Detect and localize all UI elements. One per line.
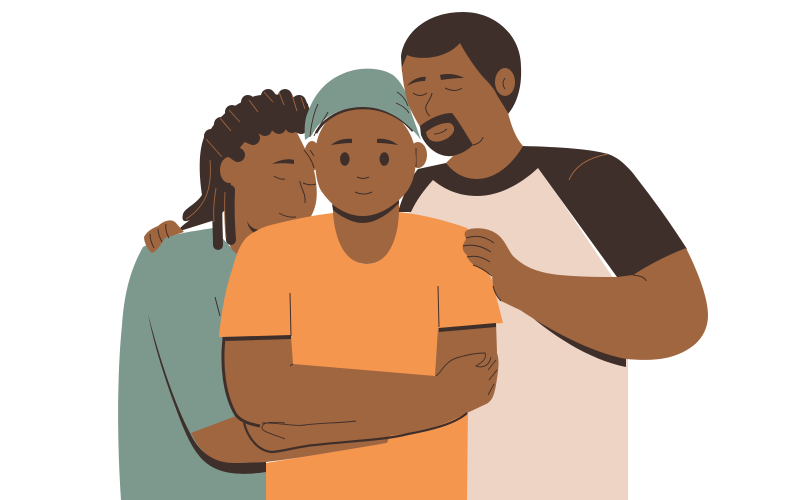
woman: teal top: [118, 228, 400, 500]
man: arm and hand: [463, 228, 708, 367]
bandana folds: [310, 92, 409, 137]
lower shirt: [266, 405, 468, 500]
hair mass: [205, 94, 309, 160]
jaw shadow: [332, 200, 399, 223]
woman's brow: [272, 159, 294, 164]
hairline shadow: [316, 108, 413, 133]
arm outline: [223, 338, 260, 426]
hanging locks: [217, 190, 231, 245]
ear line: [503, 78, 505, 89]
crossed arm: [223, 322, 499, 452]
face: [315, 106, 416, 219]
boy: orange shirt: [219, 212, 503, 376]
left ear: [304, 141, 320, 171]
boy's nose and mouth: [355, 177, 372, 194]
face and neck: [402, 43, 523, 179]
ear: [495, 68, 515, 96]
beard: [420, 113, 473, 156]
mouth patch: [426, 123, 454, 142]
shirt body: [408, 166, 628, 500]
back hair locks: [179, 135, 240, 231]
finger lines: [150, 224, 169, 248]
ear: [220, 157, 238, 183]
cornrow highlights: [186, 92, 305, 238]
woman: head and hair: [144, 92, 317, 258]
shirt sleeve and collar: [398, 146, 687, 280]
cornrows: [211, 96, 307, 155]
boy's eyes: [340, 152, 389, 166]
boy's brows: [331, 139, 398, 145]
hair: [401, 12, 521, 114]
woman's hand: [144, 220, 184, 253]
forearm: [191, 416, 400, 463]
boy: head and bandana: [304, 69, 427, 264]
finger and elbow lines: [463, 236, 646, 301]
man's closed eyes, nose, mouth: [413, 88, 483, 145]
sleeve hem left: [222, 335, 291, 341]
sleeve creases: [290, 286, 439, 366]
underarm shadow: [518, 305, 626, 367]
bandana: [305, 69, 421, 140]
shirt front and sleeves: [219, 212, 503, 376]
neck and face: [229, 118, 317, 258]
left hand outline: [262, 421, 356, 439]
back crease: [215, 297, 220, 316]
boy's neck: [333, 203, 399, 264]
man: raglan shirt: [398, 146, 687, 500]
right hand outline: [436, 353, 497, 395]
arm shadow: [148, 314, 266, 474]
sleeve seam: [569, 154, 608, 180]
arm: [463, 228, 708, 360]
torso: [118, 228, 266, 500]
man: head: [401, 12, 523, 179]
forearm shadow: [244, 413, 467, 452]
woman's closed eyes, nose, mouth: [274, 176, 316, 217]
sleeve hem right: [439, 323, 496, 332]
neck shadow: [247, 221, 262, 234]
man's brows: [407, 74, 464, 86]
boy: arms: [223, 322, 499, 500]
ear lines: [304, 148, 416, 168]
right ear: [409, 142, 427, 168]
